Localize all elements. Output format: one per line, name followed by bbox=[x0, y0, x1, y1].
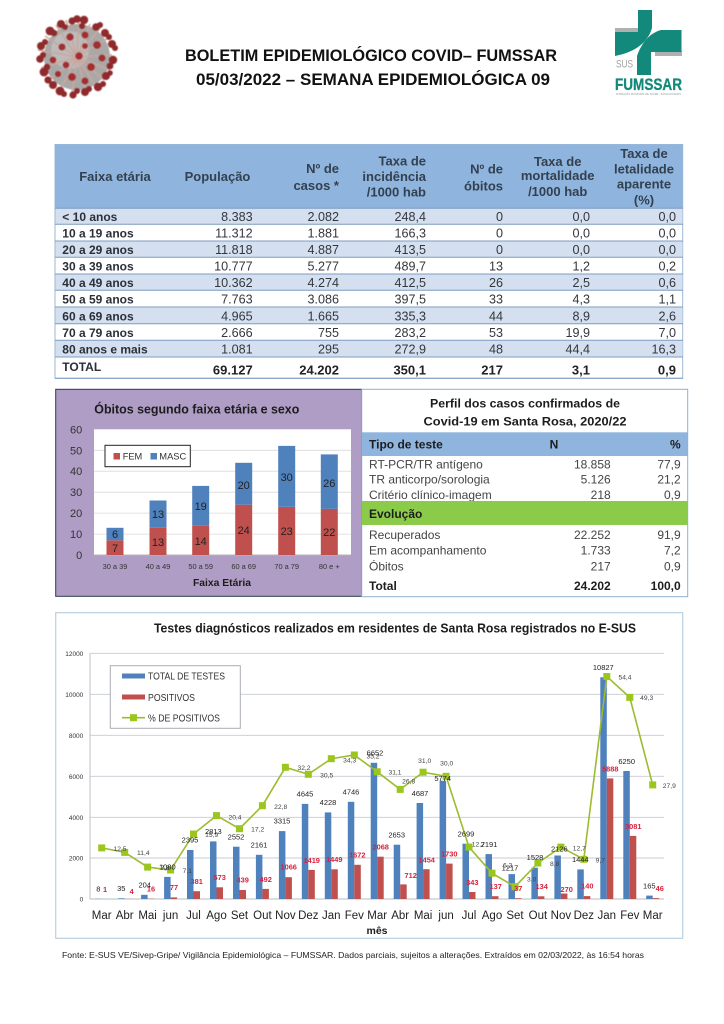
rows: outcome: 217 bbox=[591, 559, 611, 573]
labels: total de testes: 2552 bbox=[228, 833, 244, 842]
title: 05/03/2022 – SEMANA EPIDEMIOLÓGICA 09 bbox=[196, 70, 550, 89]
labels: percentual: 30,5 bbox=[320, 772, 333, 779]
x axis month labels: Abr bbox=[391, 910, 409, 922]
rows: test type: 77,9 bbox=[657, 457, 681, 471]
x axis month labels: Set bbox=[231, 910, 249, 922]
rows: test type: 21,2 bbox=[657, 473, 681, 487]
labels: percentual: 34,3 bbox=[343, 757, 356, 764]
table header: casos * bbox=[293, 178, 340, 193]
y axis labels: 50 bbox=[70, 445, 82, 457]
table rows: 70 a 79 anos bbox=[62, 326, 134, 340]
panel: profile of confirmed cases bbox=[362, 389, 688, 597]
x axis month labels: Dez bbox=[298, 910, 319, 922]
table rows: 295 bbox=[318, 342, 339, 356]
table rows: 50 a 59 anos bbox=[62, 292, 134, 306]
x axis month labels: jun bbox=[162, 910, 178, 922]
table rows: 412,5 bbox=[394, 276, 426, 290]
labels: total de testes: 2653 bbox=[388, 830, 405, 839]
x axis month labels: Mai bbox=[138, 910, 157, 922]
x axis month labels: Mai bbox=[414, 910, 432, 922]
table rows: 272,9 bbox=[394, 342, 426, 356]
table rows: 248,4 bbox=[394, 210, 426, 224]
x axis month labels: Abr bbox=[116, 910, 134, 922]
x axis month labels bbox=[92, 910, 663, 922]
x axis month labels: Jan bbox=[598, 910, 616, 922]
labels: total de testes: 165 bbox=[643, 882, 656, 891]
labels: positivos bbox=[103, 765, 664, 896]
table rows: 0,0 bbox=[658, 210, 676, 224]
panel title: Covid-19 em Santa Rosa, 2020/22 bbox=[424, 414, 627, 428]
table total row: 69.127 bbox=[213, 363, 253, 378]
labels: total de testes: 2161 bbox=[251, 841, 267, 850]
table rows: 44,4 bbox=[565, 342, 590, 356]
table rows: 0,0 bbox=[572, 243, 590, 257]
table rows: 1,2 bbox=[572, 260, 590, 274]
labels: positivos: 1066 bbox=[280, 863, 297, 872]
labels: positivos: 5888 bbox=[602, 765, 619, 774]
labels: total de testes: 2699 bbox=[458, 830, 474, 839]
table header: Taxa de bbox=[379, 154, 426, 168]
x axis month labels: Jul bbox=[186, 910, 201, 922]
table rows: 11.312 bbox=[215, 226, 253, 240]
table header: /1000 hab bbox=[528, 184, 587, 199]
labels: percentual: 49,3 bbox=[640, 695, 653, 702]
table rows: 5.277 bbox=[307, 260, 339, 274]
bar value labels: 13 bbox=[152, 509, 164, 521]
table rows: 755 bbox=[318, 326, 339, 340]
y axis labels: 40 bbox=[70, 466, 82, 478]
x axis labels: 70 a 79 bbox=[274, 562, 299, 571]
header: evolução bbox=[362, 501, 688, 525]
x axis month labels: Jul bbox=[462, 910, 476, 922]
chart title: Óbitos segundo faixa etária e sexo bbox=[94, 402, 300, 416]
table header: Taxa de bbox=[534, 154, 581, 169]
panel: diagnostic tests chart bbox=[56, 613, 683, 938]
labels: positivos: 1 bbox=[103, 885, 107, 894]
labels: percentual: 27,9 bbox=[663, 783, 676, 790]
labels: percentual: 15,9 bbox=[205, 832, 218, 839]
table total row: TOTAL bbox=[62, 360, 101, 374]
bar value labels bbox=[112, 472, 335, 555]
y axis labels bbox=[70, 424, 82, 562]
labels: total de testes: 3315 bbox=[274, 817, 290, 826]
x axis month labels: Nov bbox=[275, 910, 296, 922]
table rows: 33 bbox=[489, 292, 503, 306]
bar value labels: 20 bbox=[238, 480, 250, 492]
table rows: 283,2 bbox=[394, 326, 426, 340]
row: total: 100,0 bbox=[651, 579, 681, 593]
logo: FUMSSAR: FUMSSAR bbox=[615, 76, 682, 94]
x axis month labels: Ago bbox=[482, 910, 502, 922]
labels: positivos: 4 bbox=[130, 887, 135, 896]
labels: positivos: 492 bbox=[260, 875, 272, 884]
table rows: 2.082 bbox=[307, 210, 339, 224]
table rows: 53 bbox=[489, 326, 503, 340]
labels: percentual: 17,2 bbox=[251, 826, 264, 833]
labels: total de testes: 4228 bbox=[320, 798, 336, 807]
bar value labels: 24 bbox=[238, 525, 250, 537]
x axis month labels: Out bbox=[529, 910, 548, 922]
labels: positivos: 1730 bbox=[441, 849, 458, 858]
table total row: 24.202 bbox=[299, 363, 339, 378]
chart legend: % DE POSITIVOS bbox=[148, 714, 220, 724]
labels: total de testes: 1080 bbox=[159, 863, 176, 872]
table rows: 2,5 bbox=[572, 276, 590, 290]
header: tipo de teste: % bbox=[670, 438, 681, 452]
chart title: Testes diagnósticos realizados em residentes de Santa Rosa registrados no E-SUS bbox=[154, 622, 636, 636]
rows: outcome bbox=[369, 528, 681, 573]
table header: mortalidade bbox=[521, 168, 595, 183]
header: tipo de teste: Tipo de teste bbox=[369, 438, 443, 452]
table header: /1000 hab bbox=[367, 184, 426, 200]
table rows: 20 a 29 anos bbox=[62, 243, 134, 257]
x axis labels: 60 a 69 bbox=[231, 562, 256, 571]
title bbox=[185, 46, 557, 89]
labels: percentual: 7,1 bbox=[183, 868, 192, 875]
rows: outcome: Recuperados bbox=[369, 528, 440, 542]
rows: test type: RT-PCR/TR antígeno bbox=[369, 457, 483, 471]
x axis month labels: Set bbox=[506, 910, 524, 922]
labels: percentual: 32,2 bbox=[297, 765, 311, 772]
y axis labels: 20 bbox=[70, 508, 82, 520]
labels: total de testes: 2126 bbox=[551, 845, 568, 854]
table header: incidência bbox=[362, 169, 427, 184]
table rows: 48 bbox=[489, 342, 503, 356]
labels: total de testes: 35 bbox=[117, 884, 125, 893]
bar value labels: 19 bbox=[195, 501, 207, 513]
x axis labels bbox=[103, 562, 340, 571]
y axis labels: 4000 bbox=[69, 815, 84, 822]
x axis month labels: Mar bbox=[92, 910, 112, 922]
rows: outcome: 7,2 bbox=[664, 543, 681, 557]
x axis month labels: Dez bbox=[574, 910, 594, 922]
labels: positivos: 1454 bbox=[418, 855, 436, 864]
x axis month labels: Ago bbox=[206, 910, 227, 922]
labels: percentual: 31,1 bbox=[388, 770, 402, 777]
rows: outcome: 91,9 bbox=[657, 528, 681, 542]
table rows: 2,6 bbox=[658, 309, 676, 323]
chart legend: TOTAL DE TESTES bbox=[148, 672, 225, 683]
table rows: 44 bbox=[489, 309, 503, 323]
rows: test type: 5.126 bbox=[581, 473, 611, 487]
labels: percentual: 20,4 bbox=[228, 814, 242, 821]
chart legend: FEM bbox=[123, 452, 142, 463]
labels: positivos: 712 bbox=[405, 871, 417, 880]
table header: Nº de bbox=[470, 162, 503, 176]
table rows: 413,5 bbox=[394, 243, 426, 257]
x axis month labels: Fev bbox=[620, 910, 640, 922]
chart legend bbox=[110, 666, 240, 728]
x axis title: Faixa Etária bbox=[193, 578, 251, 589]
labels: positivos: 343 bbox=[466, 878, 478, 887]
table header: Nº de bbox=[306, 161, 339, 176]
labels: total de testes: 1444 bbox=[572, 855, 589, 864]
y axis labels bbox=[65, 651, 84, 904]
icon: coronavirus bbox=[36, 15, 118, 99]
table rows: 8,9 bbox=[572, 309, 590, 323]
labels: positivos: 2068 bbox=[372, 842, 389, 851]
labels: total de testes: 4645 bbox=[297, 790, 313, 799]
table rows: 3.086 bbox=[307, 292, 339, 306]
x axis month labels: jun bbox=[437, 910, 454, 922]
labels: total de testes: 6250 bbox=[618, 757, 635, 766]
labels: positivos: 134 bbox=[536, 882, 549, 891]
labels: total de testes: 1528 bbox=[527, 853, 543, 862]
labels: percentual: 54,4 bbox=[618, 675, 632, 682]
labels: positivos: 37 bbox=[514, 884, 522, 893]
table rows: 8.383 bbox=[221, 210, 253, 224]
labels: percentual: 22,8 bbox=[274, 804, 287, 811]
header: tipo de teste bbox=[362, 432, 688, 456]
y axis labels: 12000 bbox=[65, 651, 84, 658]
table rows: 30 a 39 anos bbox=[62, 260, 134, 274]
table rows: 40 a 49 anos bbox=[62, 276, 134, 290]
labels: positivos: 46 bbox=[656, 884, 664, 893]
table rows: 0,0 bbox=[658, 243, 676, 257]
labels: percentual: 35,2 bbox=[366, 753, 380, 760]
labels: total de testes: 4746 bbox=[343, 788, 359, 797]
table rows: 0 bbox=[496, 243, 503, 257]
table rows: 19,9 bbox=[565, 326, 590, 340]
rows: test type: 0,9 bbox=[664, 488, 681, 502]
labels: percentual bbox=[113, 675, 676, 883]
table total row: 0,9 bbox=[658, 363, 676, 378]
x axis month labels: Mar bbox=[643, 910, 663, 922]
table rows: 11.818 bbox=[215, 243, 253, 257]
bar value labels: 7 bbox=[112, 543, 118, 555]
panel title: Perfil dos casos confirmados de bbox=[430, 396, 620, 410]
table header bbox=[55, 144, 683, 208]
table header: (%) bbox=[634, 192, 654, 208]
bar value labels: 6 bbox=[112, 529, 118, 541]
labels: positivos: 137 bbox=[490, 882, 502, 891]
table rows: 1,1 bbox=[658, 292, 676, 306]
rows: test type: TR anticorpo/sorologia bbox=[369, 473, 490, 487]
title: BOLETIM EPIDEMIOLÓGICO COVID– FUMSSAR bbox=[185, 46, 557, 65]
table header: óbitos bbox=[464, 178, 503, 194]
y axis labels: 10 bbox=[70, 529, 82, 541]
table rows: 1.665 bbox=[307, 309, 339, 323]
footer source note: Fonte: E-SUS VE/Sivep-Gripe/ Vigilância Epidemiológica – FUMSSAR. Dados parciais, sujeitos a alterações. Extraídos em 02/03/2022, às 16:54 horas bbox=[62, 950, 644, 960]
header: tipo de teste: N bbox=[550, 438, 558, 452]
labels: percentual: 8,8 bbox=[550, 861, 560, 868]
y axis labels: 10000 bbox=[65, 692, 84, 699]
bar value labels: 14 bbox=[195, 536, 207, 548]
bar value labels: 13 bbox=[152, 537, 164, 549]
logo: FUMSSAR bbox=[615, 10, 682, 96]
labels: percentual: 3,0 bbox=[527, 876, 537, 883]
labels: total de testes: 204 bbox=[138, 881, 151, 890]
table rows: 13 bbox=[489, 260, 503, 274]
header: evolução: Evolução bbox=[369, 507, 422, 521]
y axis labels: 30 bbox=[70, 487, 82, 499]
table total row: 217 bbox=[481, 363, 503, 378]
bars: positivos bbox=[125, 778, 659, 899]
row: total: 24.202 bbox=[574, 579, 611, 593]
table header: População bbox=[185, 169, 250, 184]
table rows: 0,0 bbox=[658, 226, 676, 240]
x axis labels: 80 e + bbox=[319, 562, 340, 571]
table rows: 4.274 bbox=[307, 276, 339, 290]
table rows: 80 anos e mais bbox=[62, 342, 148, 356]
table header: letalidade bbox=[614, 162, 674, 176]
labels: positivos: 1449 bbox=[326, 855, 343, 864]
labels: positivos: 77 bbox=[170, 883, 178, 892]
labels: total de testes: 8 bbox=[96, 885, 100, 894]
table rows: 26 bbox=[489, 276, 503, 290]
labels: percentual: 11,4 bbox=[137, 850, 150, 857]
table rows bbox=[62, 210, 676, 356]
labels: positivos: 3081 bbox=[625, 822, 642, 831]
x axis month labels: Mar bbox=[367, 910, 387, 922]
table rows: 397,5 bbox=[394, 292, 426, 306]
table header: aparente bbox=[617, 176, 671, 192]
x axis month labels: Nov bbox=[551, 910, 571, 922]
table rows: 1.881 bbox=[307, 226, 339, 240]
labels: total de testes: 1217 bbox=[502, 863, 518, 872]
table rows: 0,0 bbox=[572, 226, 590, 240]
table total row: 350,1 bbox=[393, 363, 426, 378]
labels: percentual: 12,7 bbox=[472, 841, 485, 848]
table header: Faixa etária bbox=[79, 169, 152, 184]
table total row: 3,1 bbox=[572, 363, 590, 378]
chart legend: POSITIVOS bbox=[148, 693, 195, 704]
table rows: 1.081 bbox=[221, 342, 253, 356]
table rows: 0,2 bbox=[658, 260, 676, 274]
x axis labels: 50 a 59 bbox=[188, 562, 213, 571]
labels: percentual: 7,8 bbox=[160, 865, 170, 872]
labels: percentual: 12,5 bbox=[113, 846, 127, 853]
rows: test type: 18.858 bbox=[574, 457, 611, 471]
labels: positivos: 1672 bbox=[349, 851, 366, 860]
labels: positivos: 439 bbox=[237, 876, 249, 885]
table rows: < 10 anos bbox=[62, 210, 118, 224]
table rows: 4.965 bbox=[221, 309, 253, 323]
y axis labels: 60 bbox=[70, 424, 82, 436]
y axis labels: 0 bbox=[76, 550, 82, 562]
table rows: 2.666 bbox=[221, 326, 253, 340]
row: total: Total bbox=[369, 579, 397, 593]
rows: outcome: Óbitos bbox=[369, 558, 404, 573]
x axis labels: 40 a 49 bbox=[146, 562, 170, 571]
bar value labels: 30 bbox=[281, 472, 293, 484]
table rows: 0 bbox=[496, 210, 503, 224]
rows: test type: 218 bbox=[591, 488, 611, 502]
stacked bars: FEM bbox=[106, 505, 338, 555]
x axis month labels: Fev bbox=[345, 910, 364, 922]
table rows: 7,0 bbox=[658, 326, 676, 340]
bar value labels: 22 bbox=[323, 527, 335, 539]
labels: total de testes: 2191 bbox=[481, 840, 497, 849]
table rows: 489,7 bbox=[394, 260, 426, 274]
logo: FUMSSAR: SUS bbox=[616, 58, 633, 70]
y axis labels: 0 bbox=[80, 896, 84, 904]
rows: outcome: Em acompanhamento bbox=[369, 543, 487, 557]
x axis labels: 30 a 39 bbox=[103, 562, 127, 571]
labels: total de testes: 10827 bbox=[593, 663, 614, 672]
table rows: 0,6 bbox=[658, 276, 676, 290]
panel title bbox=[424, 396, 627, 428]
x axis month labels: Out bbox=[253, 910, 272, 922]
labels: positivos: 270 bbox=[561, 885, 573, 894]
panel: deaths by age and sex chart bbox=[56, 389, 362, 596]
table rows: 4.887 bbox=[307, 243, 339, 257]
labels: total de testes: 2395 bbox=[182, 836, 198, 845]
table rows: 7.763 bbox=[221, 292, 253, 306]
table rows: 4,3 bbox=[572, 292, 590, 306]
rows: outcome: 22.252 bbox=[574, 528, 611, 542]
chart legend bbox=[105, 445, 190, 467]
bar value labels: 23 bbox=[281, 526, 293, 538]
rows: test type bbox=[369, 457, 681, 502]
table total row bbox=[62, 360, 676, 378]
labels: positivos: 573 bbox=[214, 873, 226, 882]
table rows: 10.362 bbox=[214, 276, 253, 290]
bars: total de testes bbox=[95, 677, 653, 899]
labels: percentual: 30,0 bbox=[440, 761, 453, 768]
bar value labels: 26 bbox=[323, 478, 335, 490]
stacked bars: MASC bbox=[106, 446, 338, 540]
y axis labels: 8000 bbox=[69, 733, 84, 740]
labels: percentual: 12,7 bbox=[573, 845, 586, 852]
labels: total de testes: 2813 bbox=[205, 827, 222, 836]
table rows: 10 a 19 anos bbox=[62, 226, 134, 240]
labels: total de testes: 6652 bbox=[367, 749, 383, 758]
labels: percentual: 6,3 bbox=[503, 862, 513, 869]
labels: percentual: 26,8 bbox=[402, 779, 415, 786]
chart legend: MASC bbox=[159, 452, 186, 463]
labels: total de testes: 4687 bbox=[412, 789, 428, 798]
table rows: 166,3 bbox=[394, 226, 426, 240]
rows: outcome: 1.733 bbox=[581, 543, 611, 557]
y axis labels: 6000 bbox=[69, 774, 84, 781]
labels: percentual: 31,0 bbox=[418, 758, 431, 765]
panel: age group table bbox=[55, 144, 683, 378]
table rows: 0 bbox=[496, 226, 503, 240]
labels: total de testes bbox=[96, 663, 656, 894]
x axis month labels: Jan bbox=[322, 910, 341, 922]
table header: Taxa de bbox=[620, 146, 668, 161]
rows: test type: Critério clínico-imagem bbox=[369, 488, 492, 502]
labels: positivos: 1419 bbox=[303, 856, 320, 865]
y axis labels: 2000 bbox=[69, 856, 84, 862]
table rows: 16,3 bbox=[651, 342, 676, 356]
table rows: 0,0 bbox=[572, 210, 590, 224]
table rows: 60 a 69 anos bbox=[62, 309, 134, 323]
table rows: 10.777 bbox=[214, 260, 253, 274]
labels: positivos: 381 bbox=[191, 877, 203, 886]
row: total bbox=[369, 579, 681, 593]
labels: positivos: 140 bbox=[581, 882, 593, 891]
x axis title: mês bbox=[366, 925, 388, 937]
rows: outcome: 0,9 bbox=[664, 559, 681, 573]
line: percentual de positivos bbox=[98, 673, 656, 890]
logo: FUMSSAR: FUNDAÇÃO MUNICIPAL DE SAÚDE - SANTA ROSA/RS bbox=[616, 91, 681, 96]
labels: total de testes: 5774 bbox=[434, 774, 451, 783]
labels: positivos: 16 bbox=[147, 884, 155, 893]
labels: percentual: 9,7 bbox=[596, 857, 605, 864]
table rows: 335,3 bbox=[394, 309, 426, 323]
